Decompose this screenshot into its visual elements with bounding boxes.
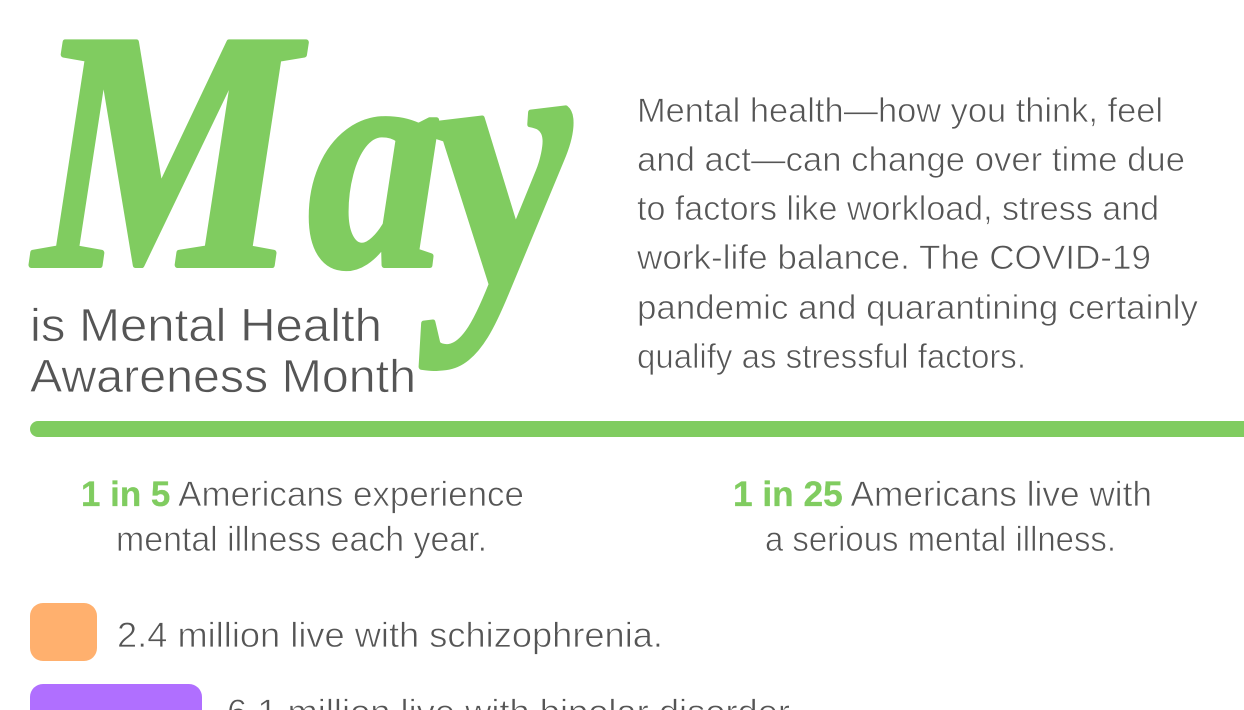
subtitle: Awareness Month — [30, 350, 416, 402]
intro paragraph: Mental health—how you think, feel — [637, 92, 1163, 130]
bar: bipolar disorder — [30, 684, 202, 710]
green divider bar — [30, 421, 1244, 437]
subtitle — [30, 299, 416, 402]
intro paragraph: pandemic and quarantining certainly — [637, 289, 1198, 327]
bar: schizophrenia — [30, 603, 97, 661]
intro paragraph: qualify as stressful factors. — [637, 338, 1026, 376]
statistic: 1 in 5 — [81, 475, 524, 559]
intro paragraph: and act—can change over time due — [637, 141, 1185, 179]
statistic: 1 in 25: 1 in 25 Americans live with — [733, 475, 1152, 514]
intro paragraph: to factors like workload, stress and — [637, 190, 1159, 228]
title: May — [30, 0, 594, 371]
statistic: 1 in 25 — [733, 475, 1152, 559]
statistic: 1 in 5: 1 in 5 Americans experience — [81, 475, 524, 514]
statistic: 1 in 5: mental illness each year. — [116, 520, 487, 559]
intro paragraph: work-life balance. The COVID-19 — [636, 239, 1151, 277]
intro paragraph — [636, 92, 1198, 376]
statistic: 1 in 25: a serious mental illness. — [765, 520, 1116, 559]
subtitle: is Mental Health — [30, 299, 382, 351]
label: schizophrenia: 2.4 million live with schizophrenia. — [117, 616, 663, 655]
